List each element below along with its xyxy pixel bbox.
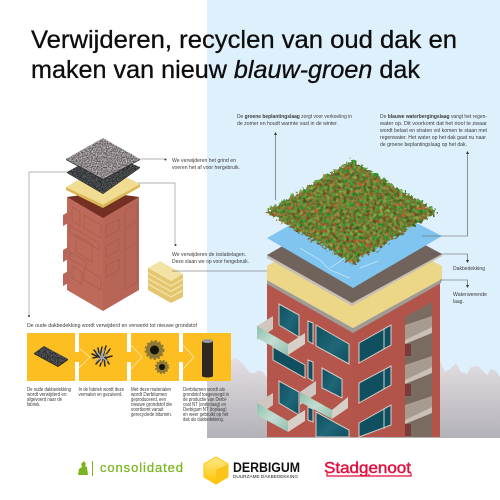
caption: step 4: grondstof toegevoegd in [183,392,229,398]
arrow: step 2 to 3 [126,345,142,369]
label: waterproof layer [453,292,487,305]
label: waterproof layer: laag. [453,299,464,305]
caption: step 4: coat NT (onderlaag) en [183,402,226,408]
text: insulation removal [172,252,249,265]
right side recessed balconies [405,302,432,437]
background: city skyline [207,358,500,438]
caption: step 3: nieuwe grondstof die [131,402,172,408]
arrow: insulation to caption [138,183,176,246]
new roof: insulation layer [267,219,442,328]
arrow: water layer to caption [422,151,469,236]
bitumen layer [67,152,140,194]
arrow: step 3 to 4 [178,345,194,369]
title: Verwijderen, recyclen van oud dak en [31,26,457,54]
step 3: gears [131,333,179,381]
label: roofing: Dakbedekking [453,266,485,272]
caption: step 4: Derbitumen wordt als [183,387,225,393]
arrow: insulation stack to new roof [172,270,279,272]
step 1: old roofing [27,333,75,381]
text: gravel removal: We verwijderen het grind en [172,158,236,164]
illustration: new building [257,283,440,437]
logo: consolidated: consolidated [100,460,183,475]
caption: step 1: fabriek. [27,402,40,408]
recycling process row [27,333,231,381]
caption: step 1: De oude dakbedekking [27,387,71,393]
caption: step 3: wordt Derbitumen [131,392,167,398]
title [31,26,457,84]
gravel layer [66,138,140,180]
arrow: step 1 to 2 [74,348,90,368]
caption: step 2 [78,387,124,398]
caption: step 3: Met deze materialen [131,387,171,393]
text: insulation removal: We verwijderen de isolatielagen. [172,252,246,258]
new roof: fascia [267,278,442,333]
new roof: roofing layer [267,206,442,306]
text: blue layer [380,114,488,148]
arrow: waterproof label [440,280,469,288]
caption: step 4 [183,387,229,423]
text: green layer: De groene beplantingslaag zorgt voor verkoeling in [237,114,352,120]
text: green layer [237,114,352,127]
right side windows [359,325,391,437]
caption: step 2: vermalen en gezuiverd. [78,392,122,398]
caption: step 2: In de fabriek wordt deze [78,387,124,393]
step 4: roofing roll [183,333,231,381]
text: gravel removal [172,158,240,171]
text: blue layer: De blauwe waterbergingslaag vangt het regen- [380,114,487,120]
caption: step 1 [27,387,71,408]
text: green layer: de zomer en houdt warmte vast in de winter. [237,121,338,127]
logo: Derbigum: DUURZAME DAKBEDEKKING [233,474,298,480]
logo: Derbigum: DERBIGUM [233,460,300,475]
caption: step 4: de productie van Derbi- [183,397,227,403]
caption: step 1: wordt verwijderd en [27,392,67,398]
new roof: green planting layer [265,160,438,264]
caption: step 4: en weer gebruikt op het [183,412,229,418]
balcony 2 [300,381,348,419]
heading: recycling row: De oude dakbedekking wordt verwijderd en verwerkt tot nieuwe grondstof [27,323,198,329]
illustration: old roof layers and building [63,138,140,311]
caption: step 4: dak als dakbedekking. [183,417,224,423]
text: blue layer: wordt belast en straten vol komen te staan met [380,128,488,134]
text: blue layer: water op. Dit voorkomt dat het riool te zwaar [380,121,487,127]
left side windows [273,304,349,437]
background: blue sky panel [207,0,500,438]
text: blue layer: de groene beplantingslaag op het dak. [380,142,467,148]
text: blue layer: regenwater. Het water op het dak gaat nu naar [380,135,486,141]
text: insulation removal: Deze slaan we op voor hergebruik. [172,259,249,265]
arrow: planting layer to caption [274,132,277,200]
text: gravel removal: voeren het af voor hergebruik. [172,165,240,171]
caption: step 3: geproduceerd, een [131,397,166,403]
logo: Derbigum [204,457,300,484]
arrow: bitumen to recycling row [28,172,67,317]
caption: step 3: gerecyclede bitumen. [131,412,172,418]
logo: Stadgenoot: Stadgenoot [324,460,412,477]
balcony 3 [257,393,305,432]
caption: step 3 [131,387,172,418]
insulation layer [66,165,140,208]
right wall [353,283,440,437]
balcony 1 [257,316,305,355]
label: waterproof layer: Waterwerende [453,292,487,298]
new roof: blue water storage layer [267,190,442,288]
title: maken van nieuw blauw-groen dak [31,56,420,84]
left wall [267,283,353,437]
caption: step 1: afgevoerd naar de [27,397,62,403]
old building [63,192,139,311]
caption: step 3: voortkomt vanuit [131,407,164,413]
arrow: gravel to caption [140,158,166,160]
caption: step 4: Derbigum NT (toplaag) [183,407,227,413]
arrow: roofing label [430,254,469,263]
step 2: shredded roofing [79,333,127,381]
icon: stack of insulation panels [148,261,183,303]
